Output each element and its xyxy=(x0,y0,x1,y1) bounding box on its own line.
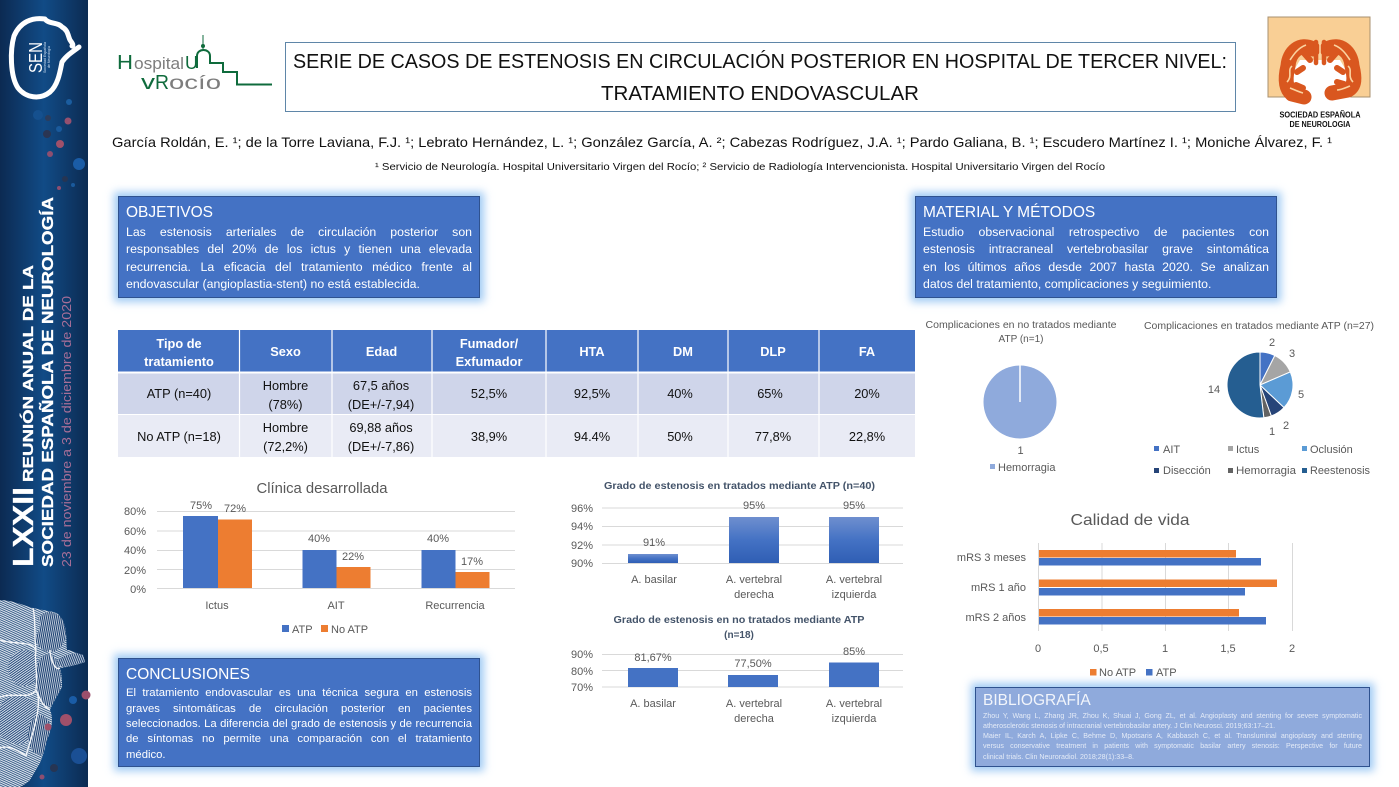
bar chart: clínica desarrollada: 40% xyxy=(427,533,449,545)
pie chart: complicaciones en no tratados: Hemorragia xyxy=(998,462,1056,474)
table header: Exfumador xyxy=(456,354,522,369)
pie chart: complicaciones en tratados xyxy=(1144,321,1374,477)
pie chart: complicaciones en tratados: 14 xyxy=(1208,384,1220,396)
bar chart: calidad de vida: mRS 1 año xyxy=(971,582,1026,594)
bar chart: clínica desarrollada xyxy=(124,480,515,636)
pie chart: complicaciones en tratados: 2 xyxy=(1269,337,1275,349)
title: TRATAMIENTO ENDOVASCULAR xyxy=(601,83,919,105)
pie chart: complicaciones en no tratados: Complicaciones en no tratados mediante xyxy=(926,320,1117,331)
table row: No ATP xyxy=(118,415,915,457)
bar chart: grado de estenosis en tratados: 95% xyxy=(843,500,865,512)
bar chart: grado de estenosis en tratados: 92% xyxy=(571,540,593,552)
bar chart: clínica desarrollada: 17% xyxy=(461,556,483,568)
text: conclusiones: graves sintomáticas de circulación posterior en pacientes xyxy=(126,702,472,714)
table row: ATP: 92,5% xyxy=(574,386,610,401)
bar chart: calidad de vida xyxy=(957,512,1295,679)
rotated event title: LXXII xyxy=(8,487,40,567)
table row: No ATP: (72,2%) xyxy=(263,439,308,454)
table header: HTA xyxy=(579,344,605,359)
bar chart: clínica desarrollada: 40% xyxy=(124,545,146,557)
bar chart: clínica desarrollada: Ictus xyxy=(205,600,229,612)
text: objetivos: endovascular (angioplastia-stent) no está establecida. xyxy=(126,277,420,291)
panel: bibliografía xyxy=(975,687,1370,767)
table row: ATP: (DE+/-7,94) xyxy=(348,397,414,412)
text: references: Zhou Y, Wang L, Zhang JR, Zhou K, Shuai J, Gong ZL, et al. Angioplasty and stenting for severe symptomatic xyxy=(983,712,1362,720)
bar chart: clínica desarrollada: 40% xyxy=(308,533,330,545)
rotated event title: REUNIÓN ANUAL DE LA xyxy=(19,265,37,482)
table row: ATP: 52,5% xyxy=(471,386,507,401)
logo: Sociedad Española de Neurología xyxy=(1268,17,1370,129)
text: material y métodos: en los últimos años desde 2007 hasta 2020. Se analizan xyxy=(923,260,1269,274)
table header xyxy=(118,330,915,372)
bar chart: grado de estenosis en no tratados: 90% xyxy=(571,649,593,661)
pie chart: complicaciones en no tratados: ATP (n=1) xyxy=(999,334,1043,345)
table header: Edad xyxy=(366,344,397,359)
bar chart: calidad de vida: ATP xyxy=(1156,667,1177,679)
text: material y métodos xyxy=(923,225,1269,291)
bar chart: calidad de vida: 0,5 xyxy=(1093,643,1109,655)
affiliations: ¹ Servicio de Neurología. Hospital Universitario Virgen del Rocío; ² Servicio de Radiología Intervencionista. Hospital Universitario Virgen del Rocío xyxy=(375,161,1105,173)
bar chart: grado de estenosis en no tratados: 77,50% xyxy=(734,658,772,670)
heading: material y métodos: MATERIAL Y MÉTODOS xyxy=(923,204,1095,221)
text: conclusiones: de síntomas no permite una comparación con el tratamiento xyxy=(126,733,472,745)
bar chart: clínica desarrollada: ATP xyxy=(292,624,313,636)
text: objetivos: recurrencia. La eficacia del tratamiento médico frente al xyxy=(126,260,472,274)
bar chart: clínica desarrollada: Clínica desarrollada xyxy=(256,480,388,497)
bar chart: grado de estenosis en no tratados: 70% xyxy=(571,682,593,694)
table header: DM xyxy=(673,344,693,359)
text: objetivos: Las estenosis arteriales de circulación posterior son xyxy=(126,225,472,239)
text: conclusiones xyxy=(126,687,472,761)
logo: Hospital Virgen del Rocío: R xyxy=(155,72,169,94)
logo: Hospital Virgen del Rocío: ospital xyxy=(134,54,184,73)
pie chart: complicaciones en tratados: 5 xyxy=(1298,389,1304,401)
pie chart: complicaciones en no tratados xyxy=(926,320,1117,474)
authors: García Roldán, E. ¹; de la Torre Laviana, F.J. ¹; Lebrato Hernández, L. ¹; González García, A. ²; Cabezas Rodríguez, J.A. ¹; Pardo Galiana, B. ¹; Escudero Martínez I. ¹; Moniche Álvarez, F. ¹ xyxy=(112,134,1332,150)
bar chart: grado de estenosis en no tratados: A. basilar xyxy=(630,698,676,710)
icon: SEN brain logo: Sociedad Española xyxy=(43,42,47,73)
bar chart: grado de estenosis en tratados: A. basilar xyxy=(631,574,677,586)
rotated event title: SOCIEDAD ESPAÑOLA DE NEUROLOGÍA xyxy=(39,197,57,567)
bar chart: clínica desarrollada: AIT xyxy=(327,600,345,612)
table header: Fumador/ xyxy=(460,336,519,351)
event dates: 23 de noviembre a 3 de diciembre de 2020 xyxy=(59,296,74,567)
bar chart: clínica desarrollada: 80% xyxy=(124,506,146,518)
text: references: Maier IL, Karch A, Lipke C, Behme D, Mpotsaris A, Kabbasch C, et al. Transluminal angioplasty and stenting xyxy=(983,732,1362,740)
table row: No ATP: (DE+/-7,86) xyxy=(348,439,414,454)
table header: FA xyxy=(859,344,875,359)
table row: No ATP: 94.4% xyxy=(574,429,610,444)
table header: Tipo de xyxy=(156,336,202,351)
bar chart: grado de estenosis en tratados: 95% xyxy=(743,500,765,512)
bar chart: grado de estenosis en tratados: A. vertebral xyxy=(826,574,882,586)
bar chart: grado de estenosis en no tratados: (n=18) xyxy=(724,630,754,641)
bar chart: calidad de vida: 1,5 xyxy=(1220,643,1236,655)
bar chart: grado de estenosis en no tratados: A. vertebral xyxy=(726,698,782,710)
table row: ATP: 20% xyxy=(854,386,880,401)
bar chart: calidad de vida: mRS 3 meses xyxy=(957,552,1026,564)
title: SERIE DE CASOS DE ESTENOSIS EN CIRCULACIÓN POSTERIOR EN HOSPITAL DE TERCER NIVEL: xyxy=(293,50,1227,73)
pie chart: complicaciones en tratados: Ictus xyxy=(1236,444,1260,456)
bar chart: clínica desarrollada: 75% xyxy=(190,500,212,512)
text: conclusiones: médico. xyxy=(126,749,166,761)
heading: objetivos: OBJETIVOS xyxy=(126,204,213,221)
bar chart: grado de estenosis en no tratados: 80% xyxy=(571,666,593,678)
bar chart: grado de estenosis en no tratados: izquierda xyxy=(832,713,877,725)
table: patient characteristics xyxy=(118,330,915,457)
pie chart: complicaciones en tratados: 1 xyxy=(1269,426,1275,438)
text: material y métodos: Estudio observacional retrospectivo de pacientes con xyxy=(923,225,1269,239)
text: material y métodos: estenosis intracraneal vertebrobasilar grave sintomática xyxy=(923,242,1269,256)
logo: Hospital Virgen del Rocío: H xyxy=(117,52,133,74)
bar chart: clínica desarrollada: 0% xyxy=(130,584,146,596)
decorative network dots top xyxy=(33,99,85,190)
bar chart: grado de estenosis en no tratados: 85% xyxy=(843,646,865,658)
table row: ATP: Hombre xyxy=(263,378,308,393)
bar chart: grado de estenosis en no tratados: A. vertebral xyxy=(826,698,882,710)
logo: Hospital Virgen del Rocío: U xyxy=(185,53,198,73)
text: references xyxy=(983,712,1362,761)
text: references: clinical trials. Clin Neuroradiol. 2018;28(1):33–8. xyxy=(983,753,1134,761)
pie chart: complicaciones en tratados: Reestenosis xyxy=(1310,465,1370,477)
table row: No ATP: 77,8% xyxy=(755,429,791,444)
table row: No ATP: 38,9% xyxy=(471,429,507,444)
text: conclusiones: seleccionados. La diferencia del grado de estenosis y de recurrencia xyxy=(126,718,472,730)
bar chart: grado de estenosis en tratados: 91% xyxy=(643,537,665,549)
bar chart: grado de estenosis en tratados: izquierda xyxy=(832,589,877,601)
pie chart: complicaciones en tratados: Oclusión xyxy=(1310,444,1353,456)
bar chart: grado de estenosis en tratados: A. vertebral xyxy=(726,574,782,586)
pie chart: complicaciones en tratados: Disección xyxy=(1163,465,1211,477)
table header: DLP xyxy=(760,344,786,359)
bar chart: calidad de vida: 2 xyxy=(1289,643,1295,655)
bar chart: calidad de vida: mRS 2 años xyxy=(965,612,1026,624)
text: material y métodos: datos del tratamiento, complicaciones y seguimiento. xyxy=(923,277,1211,291)
bar chart: clínica desarrollada: 60% xyxy=(124,526,146,538)
rotated event title xyxy=(8,197,57,567)
logo: Sociedad Española de Neurología: SOCIEDAD ESPAÑOLA xyxy=(1280,110,1361,120)
bar chart: grado de estenosis en tratados xyxy=(571,481,903,601)
pie chart: complicaciones en tratados: Complicaciones en tratados mediante ATP (n=27) xyxy=(1144,321,1374,332)
icon: hatched brain xyxy=(0,595,90,787)
panel: objetivos xyxy=(118,196,480,298)
panel: material y métodos xyxy=(915,196,1277,298)
table row: No ATP: 22,8% xyxy=(849,429,885,444)
logo: Hospital Virgen del Rocío: ocío xyxy=(169,73,221,94)
bar chart: clínica desarrollada: 20% xyxy=(124,565,146,577)
decorative network dots bottom xyxy=(40,690,90,780)
bar chart: clínica desarrollada: 72% xyxy=(224,503,246,515)
table row: No ATP: Hombre xyxy=(263,420,308,435)
bar chart: grado de estenosis en tratados: 94% xyxy=(571,521,593,533)
table row: ATP xyxy=(118,374,915,414)
pie chart: complicaciones en no tratados: 1 xyxy=(1017,445,1024,457)
logo: Hospital Virgen del Rocío xyxy=(117,35,272,94)
logo: Hospital Virgen del Rocío: v xyxy=(141,72,155,94)
bar chart: grado de estenosis en tratados: derecha xyxy=(734,589,775,601)
table row: No ATP: 69,88 años xyxy=(349,420,413,435)
bar chart: calidad de vida: No ATP xyxy=(1099,667,1136,679)
table header: Sexo xyxy=(270,344,301,359)
table row: ATP: ATP (n=40) xyxy=(147,386,211,401)
table row: ATP: 67,5 años xyxy=(353,378,409,393)
table row: No ATP: 50% xyxy=(667,429,693,444)
icon: SEN brain logo xyxy=(11,19,79,97)
text: references: versus conservative treatment in patients with symptomatic basilar artery stenosis: Perspective for future xyxy=(983,742,1362,750)
text: conclusiones: El tratamiento endovascular es una técnica segura en estenosis xyxy=(126,687,472,699)
bar chart: grado de estenosis en no tratados xyxy=(571,615,903,725)
table row: No ATP: No ATP (n=18) xyxy=(137,429,221,444)
pie chart: complicaciones en tratados: AIT xyxy=(1163,444,1180,456)
table row: ATP: 65% xyxy=(757,386,783,401)
text: objetivos xyxy=(126,225,472,291)
icon: SEN brain logo: de Neurología xyxy=(47,46,51,68)
bar chart: grado de estenosis en tratados: 96% xyxy=(571,503,593,515)
title xyxy=(286,42,1236,112)
bar chart: calidad de vida: 1 xyxy=(1162,643,1168,655)
pie chart: complicaciones en tratados: 2 xyxy=(1283,420,1289,432)
table header: tratamiento xyxy=(144,354,214,369)
panel: conclusiones xyxy=(118,658,480,767)
bar chart: clínica desarrollada: No ATP xyxy=(331,624,368,636)
heading: bibliografía: BIBLIOGRAFÍA xyxy=(983,692,1091,709)
bar chart: calidad de vida: Calidad de vida xyxy=(1070,512,1190,529)
bar chart: grado de estenosis en no tratados: Grado de estenosis en no tratados mediante ATP xyxy=(614,615,865,626)
bar chart: grado de estenosis en no tratados: derecha xyxy=(734,713,775,725)
bar chart: grado de estenosis en tratados: Grado de estenosis en tratados mediante ATP (n=40) xyxy=(604,481,875,492)
sidebar banner xyxy=(0,0,90,787)
table row: ATP: (78%) xyxy=(268,397,303,412)
icon: SEN brain logo: SEN xyxy=(26,42,46,73)
table row: ATP: 40% xyxy=(667,386,693,401)
bar chart: clínica desarrollada: Recurrencia xyxy=(425,600,486,612)
bar chart: grado de estenosis en no tratados: 81,67% xyxy=(634,652,672,664)
text: objetivos: responsables del 20% de los ictus y tienen una elevada xyxy=(126,242,472,256)
bar chart: calidad de vida: 0 xyxy=(1035,643,1041,655)
pie chart: complicaciones en tratados: Hemorragia xyxy=(1236,465,1297,477)
heading: conclusiones: CONCLUSIONES xyxy=(126,666,250,683)
text: references: atherosclerotic stenosis of intracranial vertebrobasilar artery. J Clin Neurosci. 2019;63:17–21. xyxy=(983,722,1275,730)
pie chart: complicaciones en tratados: 3 xyxy=(1289,348,1295,360)
logo: Sociedad Española de Neurología: DE NEUROLOGIA xyxy=(1290,120,1351,129)
bar chart: grado de estenosis en tratados: 90% xyxy=(571,558,593,570)
bar chart: clínica desarrollada: 22% xyxy=(342,551,364,563)
